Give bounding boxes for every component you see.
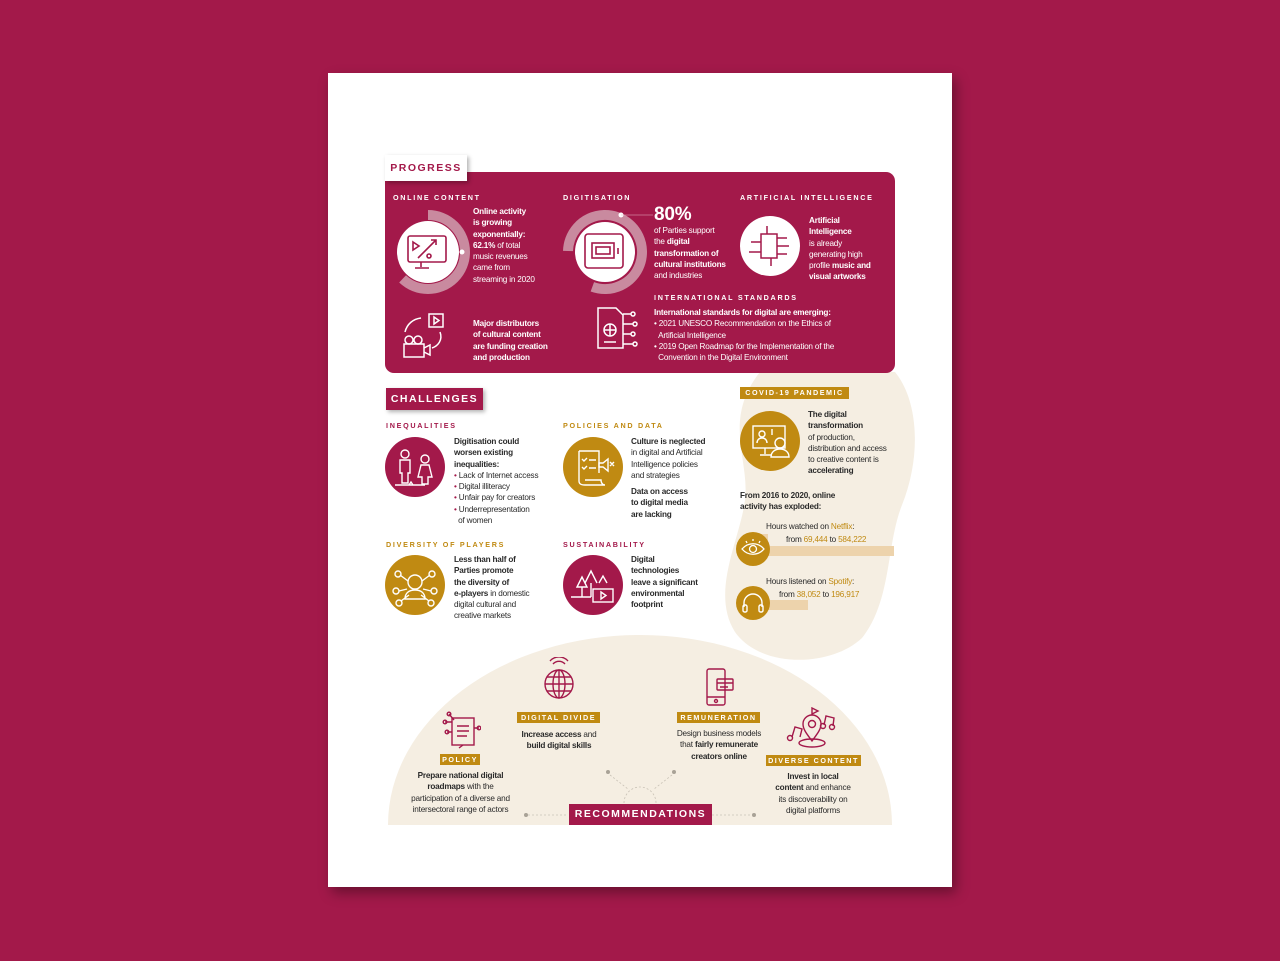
ai circle (740, 216, 800, 276)
challenge: sustainability: environmental (631, 589, 684, 598)
online content ring (391, 215, 465, 289)
text: AI (809, 216, 871, 281)
challenge: sustainability: technologies (631, 566, 679, 575)
challenge: diversity of players: Less than half of (454, 555, 516, 564)
text: standards: International standards for digital are emerging: (654, 308, 831, 317)
stat: 80%: of Parties support (654, 226, 715, 235)
text: online activity: exponentially: (473, 230, 525, 239)
text: covid: The digital (808, 410, 847, 419)
stat: 80% (654, 204, 726, 280)
text: online activity: came from (473, 263, 510, 272)
text: AI: is already (809, 239, 842, 248)
challenge: inequalities: • Lack of Internet access (454, 471, 538, 480)
tag: covid (740, 387, 849, 399)
text: AI: Artificial (809, 216, 840, 225)
tag: covid: COVID-19 PANDEMIC (745, 388, 844, 397)
challenge: inequalities: • Underrepresentation (454, 505, 530, 514)
rec: diverse content: its discoverability on (779, 795, 847, 804)
challenge: diversity of players: digital cultural and (454, 600, 516, 609)
rec: policy: intersectoral range of actors (413, 805, 508, 814)
challenge: policies and data: are lacking (631, 510, 672, 519)
rec: diverse content: content and enhance (775, 783, 851, 792)
challenge: policies and data: in digital and Artificial (631, 448, 702, 457)
text: covid: distribution and access (808, 444, 887, 453)
stat: 80%: cultural institutions (654, 260, 726, 269)
challenge: inequalities: • Digital illiteracy (454, 482, 510, 491)
heading: international standards: INTERNATIONAL STANDARDS (654, 293, 798, 302)
text: online activity: music revenues (473, 252, 528, 261)
text: exploded: From 2016 to 2020, online (740, 491, 835, 500)
text: online activity: streaming in 2020 (473, 275, 535, 284)
heading: online content: ONLINE CONTENT (393, 193, 481, 202)
stat: spotify (736, 577, 860, 620)
rec: remuneration: that fairly remunerate (680, 740, 758, 749)
text: AI: profile music and (809, 261, 871, 270)
page sheet (328, 73, 952, 887)
challenge: policies and data: POLICIES AND DATA (563, 421, 664, 430)
stat: netflix: Hours watched on Netflix: (766, 522, 854, 531)
text: distributors: are funding creation (473, 342, 548, 351)
text: online activity (473, 207, 535, 284)
challenge: sustainability: SUSTAINABILITY (563, 540, 646, 549)
text: online activity: Online activity (473, 207, 526, 216)
stat: 80%: the digital (654, 237, 690, 246)
text: standards: • 2021 UNESCO Recommendation on the Ethics of (654, 319, 831, 328)
challenge: inequalities: worsen existing (454, 448, 513, 457)
digitisation ring (558, 205, 653, 299)
standards icon (598, 308, 637, 348)
rec: remuneration: Design business models (677, 729, 761, 738)
challenge: diversity of players: DIVERSITY OF PLAYERS (386, 540, 505, 549)
rec: remuneration: creators online (691, 752, 747, 761)
panel: progress (385, 172, 895, 373)
tab: progress (385, 155, 467, 181)
rec: diverse content: DIVERSE CONTENT (768, 756, 859, 765)
challenge: policies and data: Intelligence policies (631, 460, 698, 469)
rec: digital divide: Increase access and (522, 730, 596, 739)
text: distributors: of cultural content (473, 330, 541, 339)
challenge: sustainability (563, 540, 698, 615)
stat: spotify: from 38,052 to 196,917 (779, 590, 859, 599)
text: covid: accelerating (808, 466, 853, 475)
text: exploded: activity has exploded: (740, 502, 821, 511)
text: covid: transformation (808, 421, 863, 430)
text: exploded (740, 491, 835, 511)
tab: progress: PROGRESS (390, 162, 462, 174)
challenge: diversity of players: the diversity of (454, 578, 509, 587)
challenge: policies and data: Culture is neglected (631, 437, 705, 446)
challenge: inequalities: • Unfair pay for creators (454, 493, 535, 502)
text: standards: Artificial Intelligence (658, 331, 726, 340)
challenge: policies and data: to digital media (631, 498, 688, 507)
rec: remuneration (677, 668, 762, 761)
challenge: sustainability: Digital (631, 555, 655, 564)
title: recommendations (569, 804, 712, 825)
rec: policy: participation of a diverse and (411, 794, 510, 803)
rec: digital divide: build digital skills (527, 741, 591, 750)
challenge: inequalities (385, 421, 538, 525)
stat: netflix (736, 522, 894, 566)
text: standards (654, 308, 834, 362)
tab: challenges: CHALLENGES (391, 393, 478, 405)
text: online activity: 62.1% of total (473, 241, 520, 250)
heading: AI: ARTIFICIAL INTELLIGENCE (740, 193, 874, 202)
text: covid: to creative content is (808, 455, 879, 464)
rec: diverse content: Invest in local (787, 772, 839, 781)
rec: diverse content: digital platforms (786, 806, 840, 815)
rec: policy: Prepare national digital (418, 771, 503, 780)
text: covid (808, 410, 887, 475)
challenge: policies and data: and strategies Data on access (631, 471, 688, 496)
stat: 80%: transformation of (654, 249, 718, 258)
distributors icon (404, 314, 443, 357)
challenge: policies and data (563, 421, 705, 519)
stat: 80%: and industries (654, 271, 702, 280)
text: distributors (473, 319, 548, 362)
text: distributors: Major distributors (473, 319, 539, 328)
text: standards: Convention in the Digital Environment (658, 353, 788, 362)
text: standards: • 2019 Open Roadmap for the Implementation of the (654, 342, 834, 351)
text: distributors: and production (473, 353, 530, 362)
rec: diverse content (766, 707, 861, 815)
challenge: sustainability: leave a significant (631, 578, 698, 587)
challenge: sustainability: footprint (631, 600, 663, 609)
challenge: diversity of players: creative markets (454, 611, 511, 620)
stat: spotify: Hours listened on Spotify: (766, 577, 854, 586)
text: online activity: is growing (473, 218, 512, 227)
rec: policy (411, 712, 510, 814)
rec: digital divide: DIGITAL DIVIDE (521, 713, 596, 722)
stat: 80%: 80% (654, 204, 691, 225)
tab: challenges (386, 388, 483, 410)
rec: digital divide (517, 657, 600, 750)
text: covid: of production, (808, 433, 855, 442)
stat: netflix: from 69,444 to 584,222 (786, 535, 866, 544)
text: AI: generating high (809, 250, 862, 259)
rec: policy: roadmaps with the (427, 782, 494, 791)
text: AI: visual artworks (809, 272, 866, 281)
challenge: diversity of players (385, 540, 530, 620)
challenge: inequalities: inequalities: (454, 460, 499, 469)
challenge: inequalities: Digitisation could (454, 437, 519, 446)
rec: remuneration: REMUNERATION (680, 713, 757, 722)
challenge: inequalities: INEQUALITIES (386, 421, 457, 430)
text: AI: Intelligence (809, 227, 852, 236)
heading: digitisation: DIGITISATION (563, 193, 631, 202)
panel: recommendations (388, 635, 892, 825)
challenge: diversity of players: Parties promote (454, 566, 513, 575)
rec: policy: POLICY (442, 755, 478, 764)
panel: covid-19 (736, 387, 894, 620)
challenge: diversity of players: e-players in domestic (454, 589, 529, 598)
title: recommendations: RECOMMENDATIONS (575, 808, 706, 820)
challenge: inequalities: of women (458, 516, 492, 525)
icon: covid screen (740, 411, 800, 471)
